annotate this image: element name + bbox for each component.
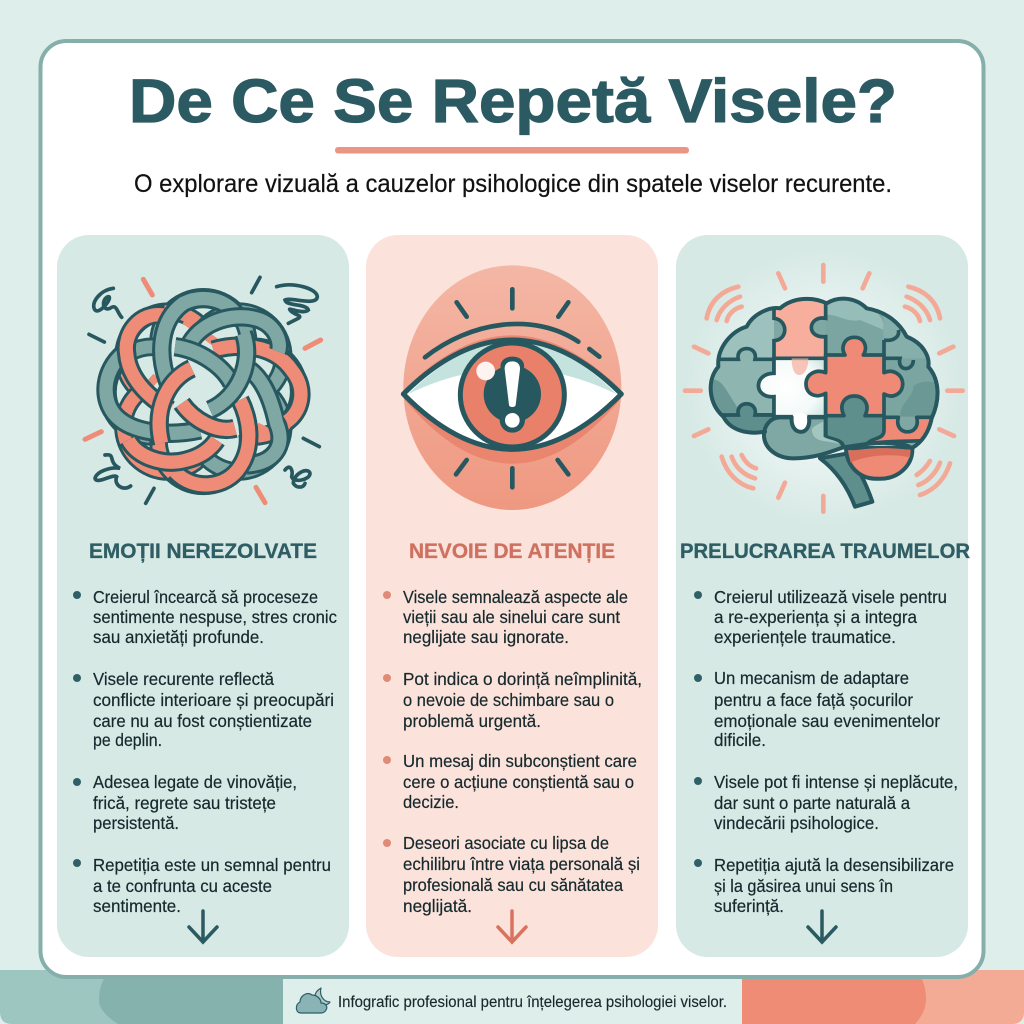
bullet list: nevoie de atenție: cere o acțiune conștientă sau o bbox=[403, 772, 634, 792]
bullet list: prelucrarea traumelor: Visele pot fi intense și neplăcute, bbox=[714, 772, 958, 792]
bullet list: emoții nerezolvate: Repetiția este un semnal pentru bbox=[93, 855, 331, 875]
bullet list: emoții nerezolvate bbox=[73, 587, 337, 916]
bullet list: nevoie de atenție: vieții sau ale sinelui care sunt bbox=[403, 607, 620, 627]
bullet list: emoții nerezolvate: conflicte interioare și preocupări bbox=[93, 690, 334, 710]
bullet list: emoții nerezolvate: Visele recurente reflectă bbox=[93, 669, 274, 689]
bullet list: nevoie de atenție: profesională sau cu sănătatea bbox=[403, 875, 623, 895]
icon: eye with exclamation bbox=[400, 265, 625, 510]
arrow: down bbox=[189, 911, 217, 942]
bullet list: nevoie de atenție: Pot indica o dorință neîmplinită, bbox=[403, 669, 642, 689]
bullet list: nevoie de atenție: problemă urgentă. bbox=[403, 711, 541, 731]
bullet list: emoții nerezolvate: a te confrunta cu aceste bbox=[93, 876, 272, 896]
panel: nevoie de atenție bbox=[366, 235, 658, 957]
panel: emoții nerezolvate bbox=[57, 235, 349, 957]
bullet list: emoții nerezolvate: sentimente nespuse, stres cronic bbox=[93, 607, 337, 627]
bullet list: nevoie de atenție: Deseori asociate cu lipsa de bbox=[403, 833, 609, 853]
bullet list: prelucrarea traumelor: Repetiția ajută la desensibilizare bbox=[714, 855, 954, 875]
subtitle: O explorare vizuală a cauzelor psihologice din spatele viselor recurente. bbox=[134, 170, 892, 198]
bullet list: prelucrarea traumelor: dar sunt o parte naturală a bbox=[714, 793, 910, 813]
bullet list: emoții nerezolvate: sentimente. bbox=[93, 896, 181, 916]
bullet list: nevoie de atenție: neglijate sau ignorate. bbox=[403, 627, 569, 647]
bullet list: nevoie de atenție: Visele semnalează aspecte ale bbox=[403, 587, 628, 607]
arrow: down bbox=[808, 911, 836, 942]
bullet list: emoții nerezolvate: pe deplin. bbox=[93, 730, 162, 750]
bullet list: prelucrarea traumelor: experiențele traumatice. bbox=[714, 627, 896, 647]
bullet list: emoții nerezolvate: persistentă. bbox=[93, 813, 179, 833]
bullet list: nevoie de atenție: o nevoie de schimbare sau o bbox=[403, 690, 614, 710]
bullet list: nevoie de atenție: decizie. bbox=[403, 792, 459, 812]
icon: tangled knot bbox=[85, 277, 321, 503]
icon: cloud and moon bbox=[296, 988, 330, 1013]
bullet list: prelucrarea traumelor: vindecării psihologice. bbox=[714, 813, 879, 833]
bullet list: emoții nerezolvate: care nu au fost conștientizate bbox=[93, 711, 312, 731]
title: De Ce Se Repetă Visele? bbox=[129, 67, 897, 135]
bullet list: prelucrarea traumelor bbox=[694, 587, 958, 916]
bullet list: emoții nerezolvate: Adesea legate de vinovăție, bbox=[93, 772, 297, 792]
heading: prelucrarea traumelor: PRELUCRAREA TRAUMELOR bbox=[680, 540, 970, 563]
bullet list: nevoie de atenție: neglijată. bbox=[403, 896, 472, 916]
bullet list: prelucrarea traumelor: suferință. bbox=[714, 896, 784, 916]
panel: prelucrarea traumelor bbox=[676, 235, 970, 957]
icon: brain puzzle bbox=[683, 247, 963, 527]
bullet list: nevoie de atenție: echilibru între viața personală și bbox=[403, 854, 640, 874]
bullet list: prelucrarea traumelor: emoționale sau evenimentelor bbox=[714, 711, 940, 731]
bullet list: nevoie de atenție: Un mesaj din subconștient care bbox=[403, 751, 637, 771]
bullet list: nevoie de atenție bbox=[383, 587, 642, 916]
bullet list: prelucrarea traumelor: dificile. bbox=[714, 730, 766, 750]
bullet list: emoții nerezolvate: Creierul încearcă să proceseze bbox=[93, 587, 318, 607]
footer band bbox=[0, 970, 1024, 1024]
heading: nevoie de atenție: NEVOIE DE ATENȚIE bbox=[409, 540, 615, 563]
footer caption: Infografic profesional pentru înțelegerea psihologiei viselor. bbox=[338, 994, 727, 1011]
bullet list: prelucrarea traumelor: Un mecanism de adaptare bbox=[714, 668, 909, 688]
bullet list: prelucrarea traumelor: Creierul utilizează visele pentru bbox=[714, 587, 947, 607]
bullet list: prelucrarea traumelor: și la găsirea unui sens în bbox=[714, 876, 893, 896]
title underline bbox=[335, 147, 689, 154]
arrow: down bbox=[498, 911, 526, 942]
bullet list: prelucrarea traumelor: a re-experiența și a integra bbox=[714, 607, 917, 627]
bullet list: emoții nerezolvate: frică, regrete sau tristețe bbox=[93, 793, 276, 813]
bullet list: prelucrarea traumelor: pentru a face față șocurilor bbox=[714, 690, 913, 710]
heading: emoții nerezolvate: EMOȚII NEREZOLVATE bbox=[89, 540, 317, 563]
bullet list: emoții nerezolvate: sau anxietăți profunde. bbox=[93, 627, 264, 647]
